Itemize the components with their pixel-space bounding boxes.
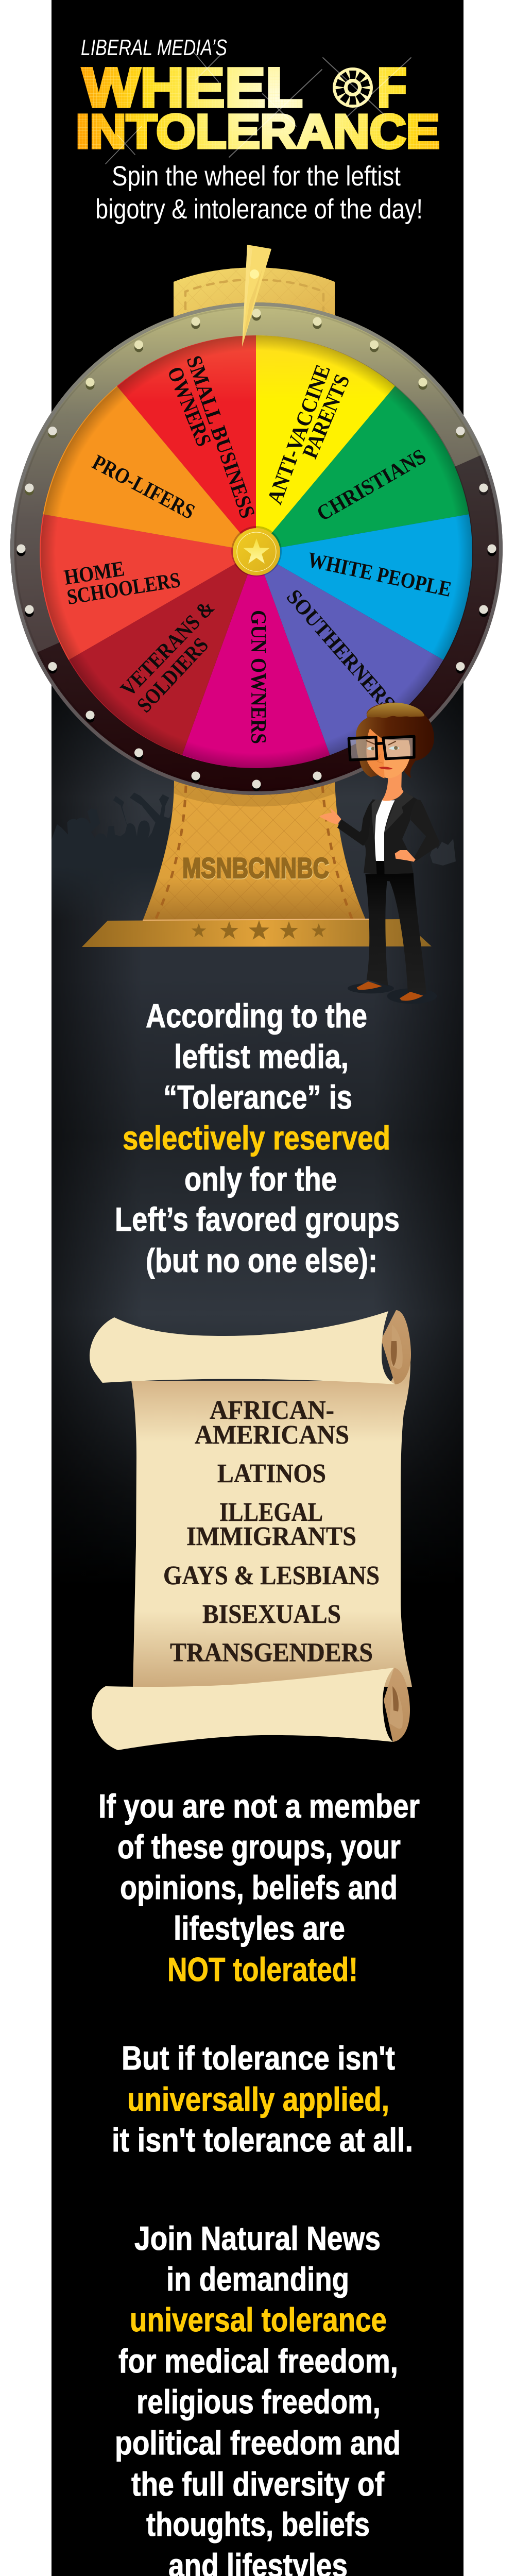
text block: universally applied: universally applied,: [127, 2080, 389, 2118]
text block: not tolerated: [98, 1787, 420, 1988]
base stars: [192, 920, 326, 940]
stand top bracket: [174, 267, 335, 330]
title kicker: LIBERAL MEDIA’S: [81, 35, 227, 60]
text block: tolerance claim: (but no one else):: [146, 1242, 377, 1279]
text block: call to action: in demanding: [166, 2260, 349, 2298]
stand base: [82, 919, 432, 947]
scroll list: GAYS & LESBIANS: [163, 1561, 380, 1590]
character glasses: [349, 736, 414, 760]
network logo text: MSNBCNNBC: [182, 852, 330, 885]
crowd silhouette: [52, 792, 456, 920]
wheel segments: [40, 335, 472, 768]
text block: tolerance claim: According to the: [146, 997, 367, 1035]
pointer: [242, 245, 271, 347]
wheel hub: [231, 526, 282, 577]
wheel labels: WHITE PEOPLE: [305, 548, 453, 602]
icon: title wheel letter O: [333, 67, 373, 108]
text block: tolerance claim: “Tolerance” is: [163, 1078, 352, 1116]
text block: call to action: thoughts, beliefs: [146, 2505, 370, 2543]
text block: call to action: the full diversity of: [131, 2465, 384, 2503]
text block: not tolerated: of these groups, your: [117, 1828, 401, 1866]
text block: tolerance claim: [115, 997, 400, 1279]
top scroll roll: [90, 1310, 411, 1384]
wheel labels: HOME: [62, 557, 126, 590]
scroll list: BISEXUALS: [202, 1600, 341, 1629]
title sparkles: [106, 52, 411, 164]
character hair: [356, 703, 434, 778]
text block: call to action: Join Natural News: [134, 2219, 381, 2257]
title word: of (F): F: [377, 56, 407, 118]
character hands: [319, 808, 416, 862]
text block: universally applied: [112, 2039, 413, 2159]
wheel labels: PARENTS: [298, 371, 355, 462]
text block: tolerance claim: Left’s favored groups: [115, 1200, 400, 1238]
scroll paper: [131, 1350, 412, 1687]
character legs: [365, 873, 426, 994]
wheel stand: [82, 267, 432, 947]
subtitle: Spin the wheel for the leftist: [112, 161, 401, 192]
text block: not tolerated: If you are not a member: [98, 1787, 420, 1825]
wheel rim: [10, 302, 503, 795]
character jacket: [337, 791, 439, 875]
scroll list: AMERICANS: [195, 1420, 349, 1450]
character shadow: [348, 983, 437, 1004]
scroll list: IMMIGRANTS: [186, 1522, 356, 1551]
wheel labels: GUN OWNERS: [246, 610, 270, 744]
title word: intolerance: INTOLERANCE: [76, 105, 440, 158]
prize wheel: [0, 245, 515, 795]
text block: call to action: [93, 2219, 432, 2576]
scroll list: LATINOS: [217, 1459, 326, 1488]
wheel labels: SCHOOLERS: [65, 568, 182, 609]
wheel labels: ANTI-VACCINE: [263, 362, 335, 507]
text block: call to action: for medical freedom,: [118, 2342, 398, 2380]
host character: [319, 703, 439, 1004]
wheel labels: OWNERS: [162, 364, 216, 450]
character face: [367, 728, 410, 778]
text block: not tolerated: opinions, beliefs and: [120, 1869, 398, 1906]
title block: [76, 35, 440, 164]
scroll list: ILLEGAL: [219, 1498, 323, 1527]
text block: tolerance claim: leftist media,: [174, 1038, 349, 1075]
text block: call to action: universal tolerance: [130, 2301, 387, 2338]
text block: not tolerated: lifestyles are: [174, 1909, 345, 1947]
wheel labels: [62, 353, 453, 744]
subtitle: bigotry & intolerance of the day!: [95, 194, 423, 225]
text block: universally applied: it isn't tolerance at all.: [112, 2121, 413, 2159]
wheel labels: SOLDIERS: [133, 633, 213, 717]
network logo text: MSNBCNNBC: [182, 852, 329, 884]
scroll list: TRANSGENDERS: [170, 1638, 373, 1667]
character shoes: [357, 981, 423, 1001]
text block: tolerance claim: only for the: [184, 1160, 337, 1198]
wheel labels: PRO-LIFERS: [88, 450, 199, 524]
bottom scroll roll: [92, 1668, 410, 1750]
text block: not tolerated: NOT tolerated!: [167, 1951, 358, 1988]
wheel labels: CHRISTIANS: [313, 445, 430, 526]
rim pegs: [16, 309, 496, 791]
wheel face shading: [41, 335, 473, 768]
character quiff: [367, 703, 424, 718]
wheel labels: SMALL BUSINESS: [182, 353, 260, 521]
title word: wheel: WHEEL: [82, 56, 303, 118]
stand column: [143, 778, 366, 921]
character neck: [382, 771, 403, 801]
text block: universally applied: But if tolerance isn't: [122, 2039, 395, 2077]
subtitle: [95, 161, 423, 225]
text block: call to action: political freedom and: [115, 2424, 401, 2462]
text block: tolerance claim: selectively reserved: [123, 1119, 390, 1157]
text block: call to action: religious freedom,: [136, 2383, 381, 2420]
wheel labels: SOUTHERNERS: [282, 585, 400, 716]
parchment scroll: [90, 1310, 412, 1750]
scroll list: AFRICAN-: [210, 1396, 334, 1425]
page panel background: [52, 0, 464, 2576]
scroll list: [163, 1396, 380, 1667]
wheel labels: VETERANS &: [116, 596, 219, 701]
